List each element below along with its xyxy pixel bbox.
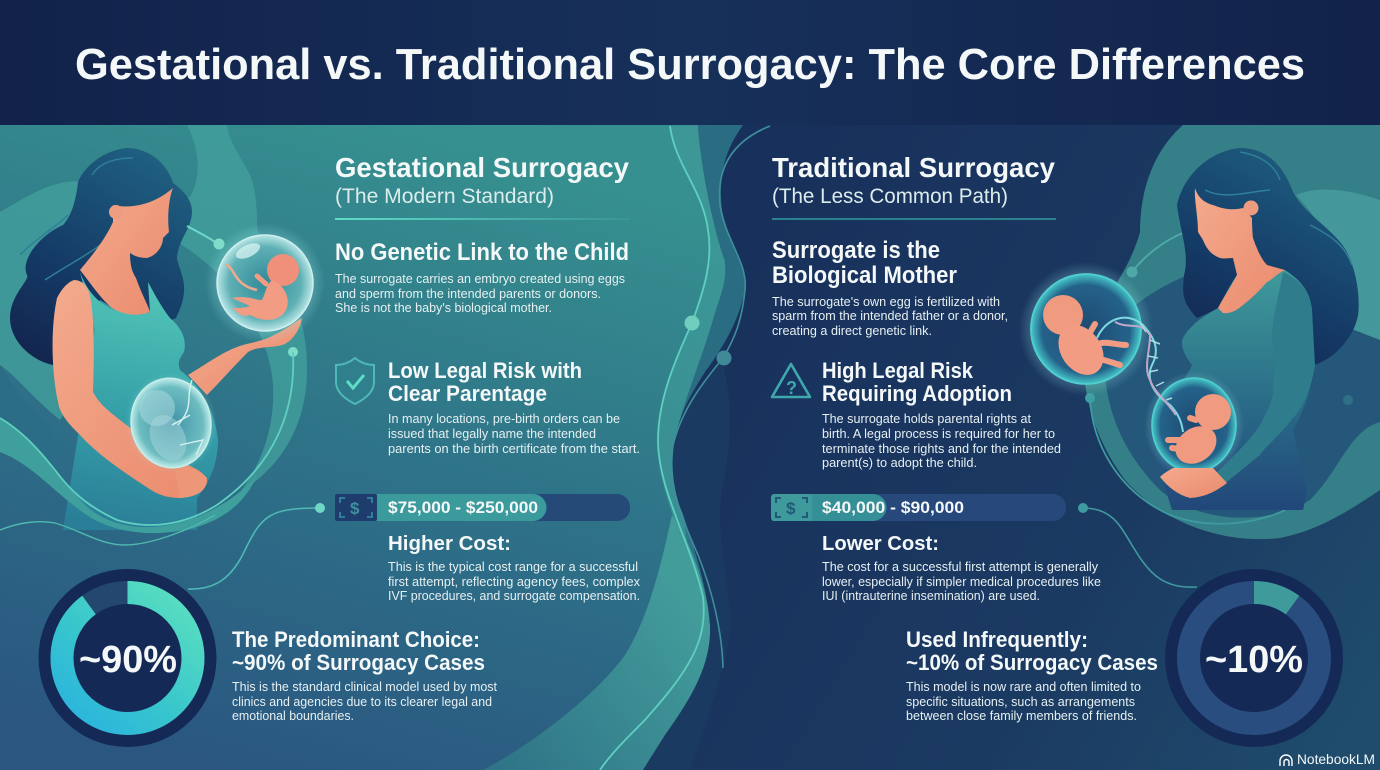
donut chart: about 90 percent: ~90%: [79, 639, 177, 681]
section: lower cost: IUI (intrauterine insemination) are used.: [822, 588, 1040, 603]
section: used infrequently: This model is now rare and often limited to: [906, 679, 1141, 694]
section: biological mother: [772, 237, 1008, 338]
section: lower cost: [822, 533, 1101, 603]
section: predominant choice: clinics and agencies due to its clearer legal and: [232, 694, 492, 709]
dress: [1155, 270, 1314, 510]
section: used infrequently: ~10% of Surrogacy Cases: [906, 650, 1158, 675]
far arm and hand: [188, 318, 302, 395]
panel: traditional surrogacy: [771, 152, 1343, 747]
section: predominant choice: The Predominant Choice:: [232, 627, 480, 652]
section: high legal risk: birth. A legal process is required for her to: [822, 426, 1055, 441]
section: no genetic link: The surrogate carries an embryo created using eggs: [335, 271, 625, 286]
sleeve and hand: [1217, 272, 1315, 485]
donut chart: about 90 percent: [38, 569, 216, 747]
dress: [63, 272, 218, 530]
section: predominant choice: emotional boundaries.: [232, 708, 354, 723]
section: biological mother: sparm from the intended father or a donor,: [772, 308, 1008, 323]
panel: gestational surrogacy: [38, 152, 640, 747]
section: used infrequently: Used Infrequently:: [906, 627, 1088, 652]
section: high legal risk: terminate those rights and for the intended: [822, 441, 1061, 456]
section: used infrequently: between close family members of friends.: [906, 708, 1137, 723]
icon: warning triangle with question mark: [772, 364, 810, 398]
section: no genetic link: She is not the baby's biological mother.: [335, 300, 552, 315]
belly with translucent fetus: [117, 366, 225, 480]
face and neck: [80, 188, 173, 315]
header band: [0, 0, 1380, 125]
section: lower cost: Lower Cost:: [822, 533, 939, 555]
near arm and hand: [53, 280, 207, 498]
cost bar: 75,000 to 250,000: [335, 494, 630, 521]
section: higher cost: Higher Cost:: [388, 533, 511, 555]
cost bar: 40,000 to 90,000: $: [786, 499, 796, 518]
left background swirls: [0, 125, 307, 492]
section: low legal risk: Low Legal Risk with: [388, 358, 582, 383]
right background swirls: [1084, 125, 1380, 539]
heading: traditional surrogacy: Traditional Surrogacy: [772, 152, 1055, 183]
face and neck: [1195, 188, 1285, 313]
background: central wave layers: [483, 125, 770, 770]
section: lower cost: lower, especially if simpler medical procedures like: [822, 574, 1101, 589]
section: used infrequently: [906, 627, 1158, 723]
section: higher cost: [388, 533, 640, 603]
heading: gestational surrogacy: Gestational Surrogacy: [335, 152, 629, 183]
cost bar: 75,000 to 250,000: $: [350, 499, 360, 518]
illustration: traditional surrogate with DNA link: [1019, 148, 1359, 510]
section: no genetic link: [335, 239, 629, 315]
cost bar: 40,000 to 90,000: $40,000 - $90,000: [822, 498, 964, 517]
illustration: gestational surrogate holding embryo bubble: [0, 148, 325, 545]
hair: [1177, 148, 1359, 365]
section: used infrequently: specific situations, such as arrangements: [906, 694, 1135, 709]
heading: traditional surrogacy: (The Less Common Path): [772, 185, 1008, 208]
section: high legal risk: parent(s) to adopt the child.: [822, 455, 977, 470]
connector: cost to donut: [1078, 503, 1197, 587]
section: predominant choice: This is the standard clinical model used by most: [232, 679, 497, 694]
cost bar: 40,000 to 90,000: [771, 494, 1066, 521]
heading: gestational surrogacy: (The Modern Standard): [335, 185, 554, 208]
section: no genetic link: No Genetic Link to the Child: [335, 239, 629, 266]
section: no genetic link: and sperm from the intended parents or donors.: [335, 286, 601, 301]
icon: warning triangle with question mark: ?: [786, 378, 797, 398]
background: left teal side: [0, 125, 725, 770]
section: low legal risk: In many locations, pre-birth orders can be: [388, 411, 620, 426]
section: biological mother: Biological Mother: [772, 262, 957, 289]
title: Gestational vs. Traditional Surrogacy: The Core Differences: [75, 40, 1305, 89]
section: high legal risk: [822, 358, 1061, 470]
logo: NotebookLM: NotebookLM: [1297, 751, 1375, 767]
connector line and dots: [1132, 232, 1185, 272]
section: lower cost: The cost for a successful first attempt is generally: [822, 559, 1098, 574]
section: low legal risk: issued that legally name the intended: [388, 426, 596, 441]
cost bar: 75,000 to 250,000: $75,000 - $250,000: [388, 498, 538, 517]
section: high legal risk: High Legal Risk: [822, 358, 974, 383]
lower swoosh band: [0, 352, 293, 545]
hair: [10, 148, 192, 365]
belly with fetus: [1144, 371, 1244, 479]
embryo bubble: [205, 223, 325, 343]
DNA helix: [1097, 318, 1183, 432]
section: low legal risk: Clear Parentage: [388, 381, 547, 406]
section: higher cost: This is the typical cost range for a successful: [388, 559, 638, 574]
section: high legal risk: Requiring Adoption: [822, 381, 1012, 406]
connector: cost to donut: [188, 503, 325, 589]
section: biological mother: creating a direct genetic link.: [772, 323, 932, 338]
section: high legal risk: The surrogate holds parental rights at: [822, 411, 1031, 426]
section: higher cost: IVF procedures, and surrogate compensation.: [388, 588, 640, 603]
icon: shield with check: [336, 358, 374, 404]
connector line and dots: [187, 226, 218, 244]
section: predominant choice: [232, 627, 497, 723]
section: biological mother: Surrogate is the: [772, 237, 940, 264]
donut chart: about 10 percent: ~10%: [1205, 639, 1303, 681]
section: predominant choice: ~90% of Surrogacy Cases: [232, 650, 485, 675]
heading: gestational surrogacy: [335, 152, 630, 220]
section: low legal risk: parents on the birth certificate from the start.: [388, 441, 640, 456]
donut chart: about 10 percent: [1165, 569, 1343, 747]
embryo bubble: [1019, 262, 1153, 396]
section: higher cost: first attempt, reflecting agency fees, complex: [388, 574, 640, 589]
heading: traditional surrogacy: [772, 152, 1056, 220]
section: biological mother: The surrogate's own egg is fertilized with: [772, 294, 1000, 309]
section: low legal risk: [388, 358, 640, 456]
